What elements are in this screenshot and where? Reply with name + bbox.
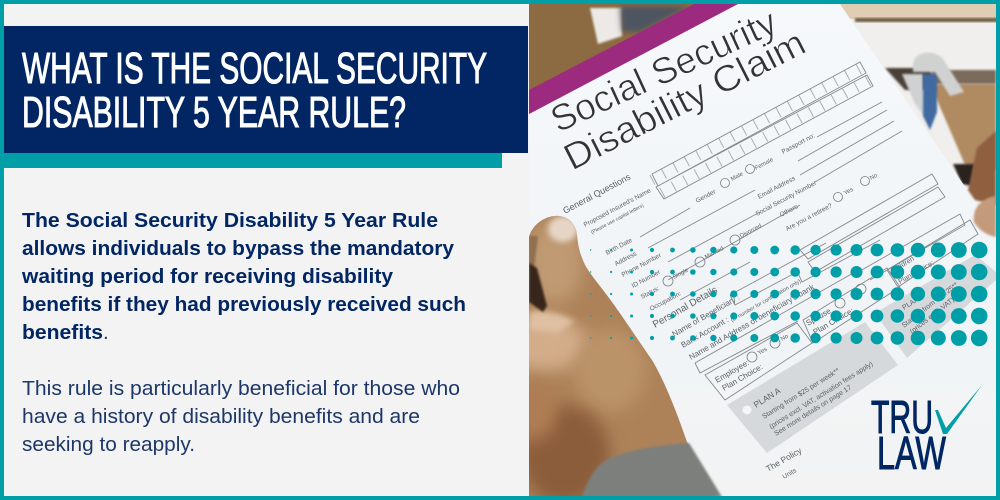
form lower labels and fields: Plan Choice:: [720, 362, 764, 393]
plan A grey box: See more details on page 17: [773, 384, 853, 438]
form upper labels: Others: [779, 203, 800, 219]
policy label: Units: [782, 467, 798, 481]
icon: logo check mark: [935, 385, 982, 434]
TruLaw logo: TRU: [871, 391, 933, 443]
form title: Disability Claim: [557, 22, 812, 178]
form lower labels and fields: ID Number: [631, 268, 662, 290]
heading panel: [4, 26, 528, 153]
form upper labels: Gender: [695, 188, 718, 205]
form lower labels and fields: No: [780, 333, 790, 343]
title text: WHAT IS THE SOCIAL SECURITY: [22, 44, 487, 93]
bold rule description: [21, 209, 466, 344]
form upper labels: Male: [730, 171, 745, 183]
form lower labels and fields: Phone Number: [621, 252, 663, 279]
halftone dot pattern: [590, 242, 988, 346]
form lower labels and fields: Name and Address of beneficiary's bank: [688, 282, 817, 362]
title text: [22, 44, 487, 137]
form lower labels and fields: (or number for confirmation only): [730, 279, 802, 324]
form lower labels and fields: Address: [614, 250, 639, 268]
title text: DISABILITY 5 YEAR RULE?: [22, 88, 406, 137]
hand holding the paper: [529, 216, 716, 496]
secondary paragraph: have a history of disability benefits and are: [22, 405, 420, 428]
plan A grey box: PLAN A: [752, 385, 783, 410]
form title: Social Security: [544, 1, 783, 140]
form upper labels: Proposed Insured's Name: [583, 187, 652, 229]
form lower labels and fields: Plan Choice:: [898, 260, 935, 286]
bold rule description: benefits if they had previously received such: [22, 293, 466, 316]
form upper labels: Birth Date: [605, 237, 634, 257]
form lower labels and fields: Divorced: [739, 223, 763, 240]
form lower labels and fields: Married: [704, 246, 725, 261]
form upper labels: No: [869, 173, 879, 182]
form upper labels: Passport no:: [781, 132, 816, 156]
form lower labels and fields: Status:: [640, 285, 661, 301]
photo background: wood desk and keys: [529, 4, 996, 188]
form upper labels: [561, 102, 978, 300]
purple header band: [529, 4, 738, 114]
form lower labels and fields: Children: [890, 256, 916, 275]
bold rule description: benefits: [22, 321, 103, 344]
TruLaw logo: LAW: [877, 427, 946, 479]
secondary paragraph: seeking to reapply.: [22, 433, 195, 456]
bold rule description: allows individuals to bypass the mandatory: [22, 237, 455, 260]
form upper labels: (Please use capital letters): [590, 203, 645, 236]
form upper labels: Are you a retiree?: [785, 202, 834, 233]
right hand fingers: [968, 131, 996, 237]
plan A grey box: Starting from $25 per week**: [761, 367, 841, 421]
plan B grey box: Starting from $45.25**: [901, 281, 960, 330]
plan B grey box: [875, 255, 996, 358]
sleeve: [582, 443, 722, 497]
form lower labels and fields: Plan Choice:: [812, 306, 855, 337]
form lower labels and fields: Personal Details: [651, 285, 720, 331]
bold rule description: waiting period for receiving disability: [21, 265, 394, 288]
form lower labels and fields: Employee:: [714, 358, 751, 385]
bold rule description: The Social Security Disability 5 Year Rule: [22, 209, 438, 232]
form upper labels: Social Security Number: [755, 179, 819, 218]
form lower labels and fields: Single: [672, 267, 690, 281]
plan A grey box: (prices excl. VAT, activation fees apply): [768, 361, 874, 431]
secondary paragraph: [22, 377, 460, 456]
form lower labels and fields: Yes: [757, 347, 768, 357]
form upper labels: Female: [754, 157, 775, 172]
secondary paragraph: This rule is particularly beneficial for those who: [22, 377, 460, 400]
form lower labels and fields: Bank Account :: [680, 315, 730, 350]
TruLaw logo: [871, 385, 982, 479]
photo: hand holding Social Security Disability Claim form: [500, 1, 1000, 500]
form character boxes: [652, 62, 873, 199]
plan B grey box: PLAN B: [901, 292, 926, 312]
bold rule description: .: [103, 321, 109, 344]
form lower labels and fields: [614, 223, 935, 400]
form upper labels: Yes: [843, 187, 855, 197]
plan A grey box: [727, 322, 898, 453]
form lower labels and fields: Occupation:: [649, 290, 683, 313]
form upper labels: General Questions: [561, 171, 633, 216]
teal accent bar: [4, 153, 502, 168]
form lower labels and fields: Name of Beneficiary :: [670, 293, 741, 339]
form upper labels: Email Address: [757, 175, 797, 201]
plan B grey box: (prices excl. VAT): [909, 297, 956, 336]
paper sheet: [529, 4, 996, 240]
form lower labels and fields: Spouse: [804, 306, 833, 328]
policy label: The Policy: [764, 445, 804, 474]
